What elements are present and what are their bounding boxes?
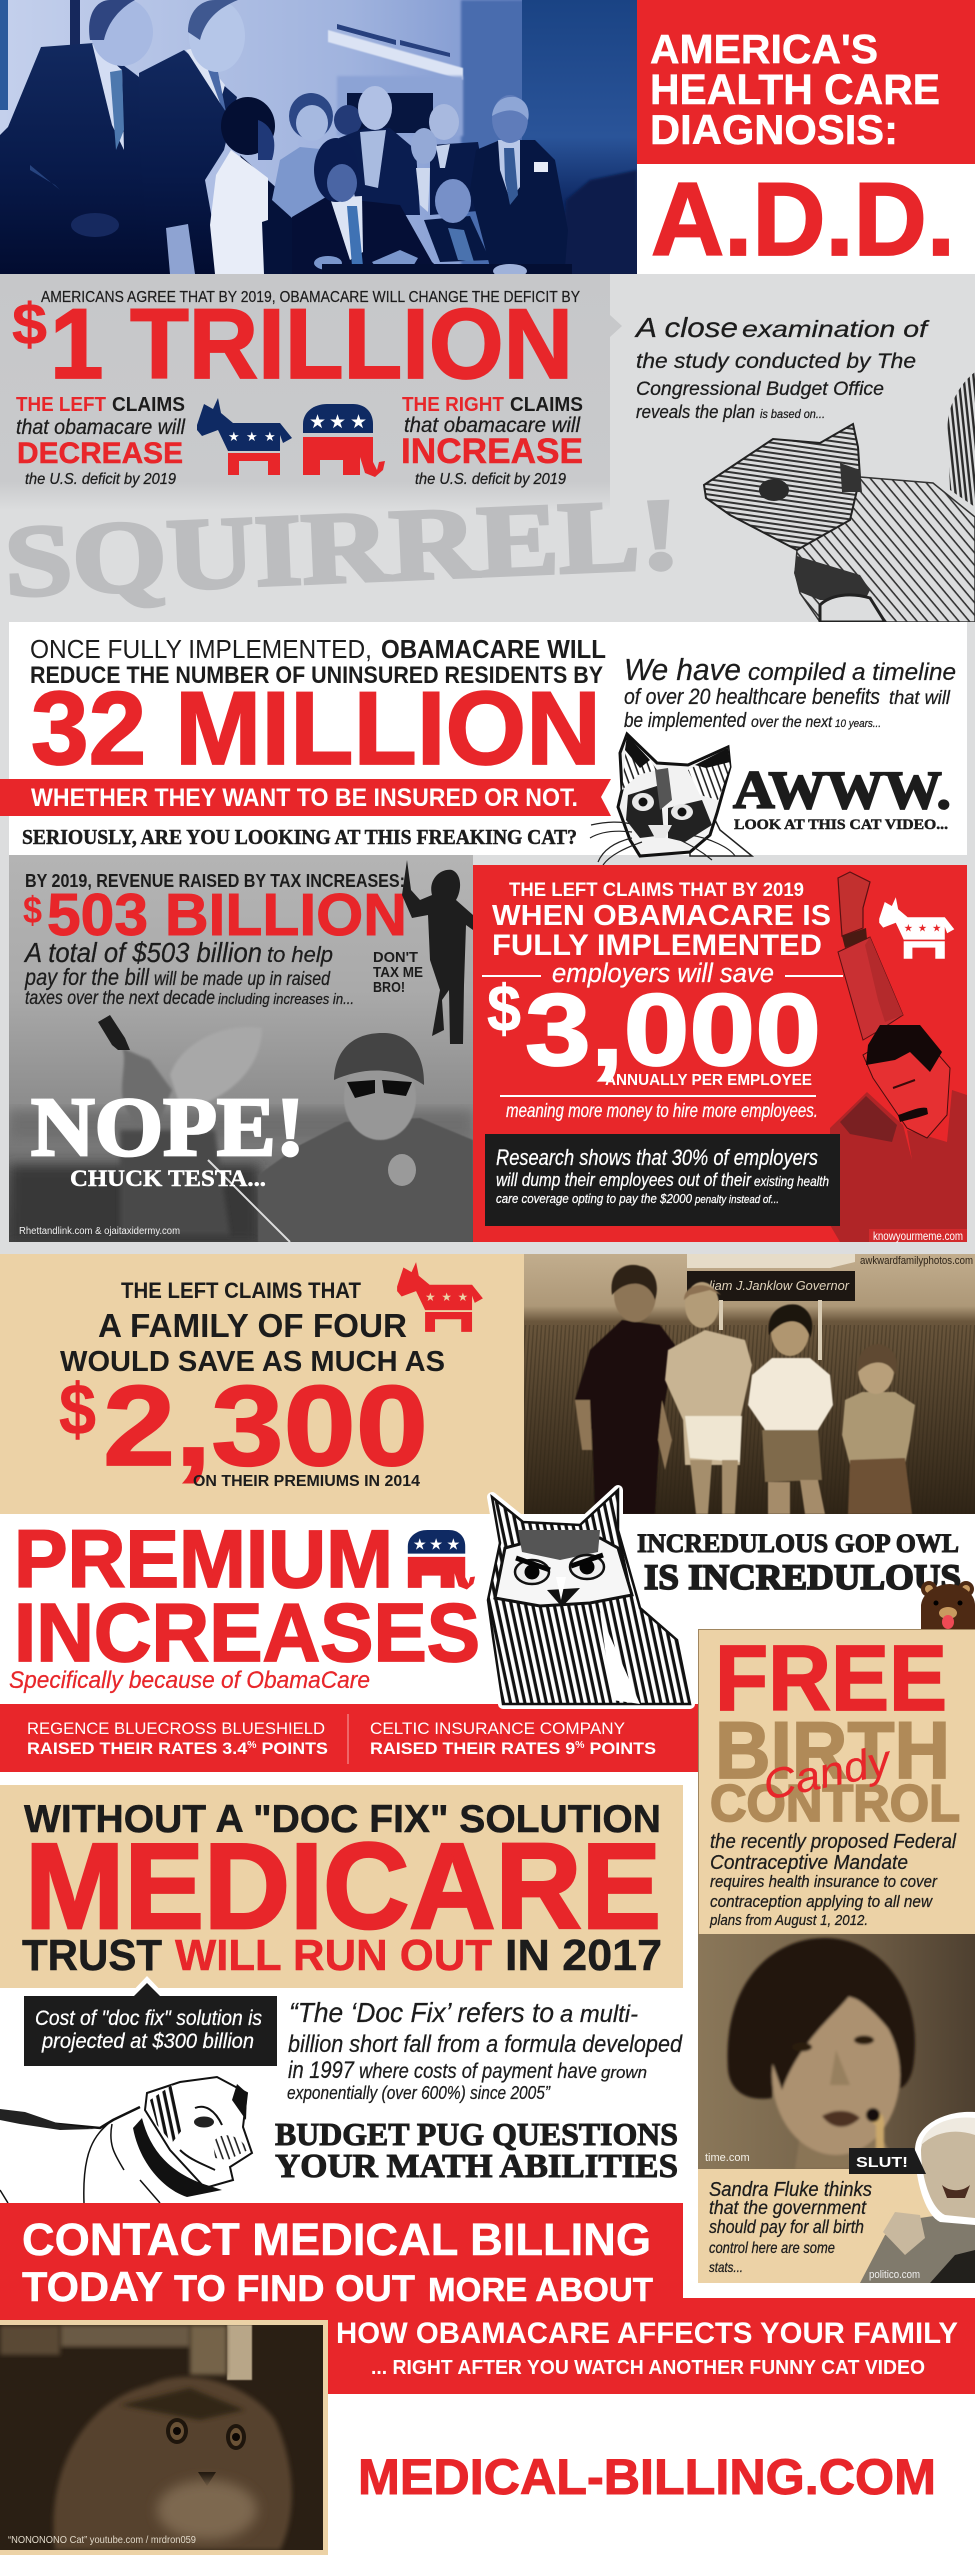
- text: timeline: be implemented: [624, 710, 747, 732]
- icon: democratic donkey: ★★★: [228, 430, 276, 445]
- right claim: the U.S. deficit by 2019: [415, 471, 566, 488]
- text block: [709, 2179, 872, 2275]
- icon: elephant: [408, 1530, 475, 1589]
- panel: employers will save: [473, 865, 967, 1243]
- figure: seated man: [424, 179, 490, 262]
- band: insurer rate rises: POINTS: [256, 1739, 328, 1758]
- text: doc fix quote: exponentially (over 600%) since 2005”: [287, 2083, 551, 2103]
- governor sign: [687, 1271, 855, 1301]
- heading: AWWW: LOOK AT THIS CAT VIDEO...: [734, 817, 948, 833]
- text: timeline: over the next: [751, 714, 832, 731]
- figure 4: [842, 1344, 915, 1514]
- panel: medicare: [0, 1785, 683, 1988]
- heading: once fully implemented: [30, 634, 606, 689]
- credit: time.com: time.com: [705, 2152, 750, 2164]
- subheading: Specifically because of ObamaCare: [9, 1667, 370, 1694]
- text: contraceptive mandate: Contraceptive Mandate: [710, 1852, 908, 1874]
- callout: research box: will dump their employees out of their: [496, 1170, 752, 1190]
- callout: research box: Research shows that 30% of employers: [496, 1145, 818, 1170]
- subheading: employers will save: employers will save: [552, 958, 774, 988]
- photo: Sandra Fluke: [698, 1934, 975, 2169]
- figure 2: [665, 1282, 752, 1514]
- big number: $1 trillion: 1 TRILLION: [50, 288, 573, 399]
- owl wing gap: [600, 1612, 640, 1704]
- text: doc fix quote: billion short fall from a formula developed: [288, 2031, 683, 2058]
- band: insurer rate rises: [0, 1704, 698, 1772]
- hair: [866, 1025, 942, 1072]
- heading: medicare: MEDICARE: [25, 1818, 661, 1954]
- call to action text: [22, 2214, 958, 2379]
- figure: boy in white shirt: [210, 97, 300, 274]
- heading: family savings: A FAMILY OF FOUR: [98, 1307, 407, 1344]
- heading: free birth control: CONTROL: [710, 1775, 960, 1833]
- text: contraceptive mandate: requires health insurance to cover: [710, 1872, 938, 1891]
- right claim: INCREASE: [401, 432, 583, 471]
- ribbon: insured or not: WHETHER THEY WANT TO BE INSURED OR NOT.: [31, 784, 578, 812]
- text: total of $503 billion: to help: [267, 942, 333, 967]
- heading: NOPE: CHUCK TESTA...: [70, 1166, 266, 1191]
- text: timeline: of over 20 healthcare benefits: [624, 684, 880, 709]
- callout: cost of doc fix: [24, 1976, 277, 2066]
- text: total of $503 billion: will be made up in raised: [154, 969, 331, 990]
- left claim: that obamacare will: [16, 416, 186, 439]
- panel: tax revenue with Chuck Testa photo: [9, 855, 473, 1243]
- left claim: the U.S. deficit by 2019: [25, 471, 176, 488]
- big number: $3,000: ANNUALLY PER EMPLOYEE: [605, 1072, 812, 1089]
- banner: contact medical billing: [0, 2203, 975, 2394]
- left claim: [16, 394, 186, 488]
- callout: cost of doc fix: projected at $300 billion: [41, 2030, 254, 2053]
- pug head: [145, 2077, 252, 2188]
- photo elements: [9, 1015, 473, 1243]
- text: total of $503 billion: A total of $503 billion: [23, 937, 262, 968]
- big acronym A.D.D.: A.D.D.: [651, 162, 955, 278]
- text block: Sandra Fluke thinks: [709, 2179, 872, 2201]
- text: timeline: that will: [889, 688, 951, 709]
- text: total of $503 billion: pay for the bill: [24, 964, 150, 990]
- heading: free birth control: [710, 1626, 960, 1833]
- big number: 32 million: 32 MILLION: [31, 671, 601, 787]
- icon: budget pug: [0, 2077, 252, 2203]
- pug collar: [133, 2118, 222, 2197]
- panel: family of four: [0, 1254, 524, 1514]
- heading: trust runs out: [22, 1931, 662, 1980]
- icon: owl: [488, 1490, 690, 1704]
- icon: pedobear: [921, 1581, 975, 1629]
- heading: trust runs out: TRUST: [22, 1931, 162, 1980]
- figure: Reid and others: [334, 86, 490, 215]
- callout: research box: care coverage opting to pay the $2000: [496, 1191, 693, 1206]
- squirrel body: [795, 477, 975, 622]
- panel: premium increases: [0, 1514, 698, 1772]
- text: contraceptive mandate: plans from August 1, 2012.: [709, 1912, 868, 1929]
- text block: stats...: [709, 2259, 743, 2275]
- squirrel tail: [948, 372, 975, 507]
- text: close examination: Congressional Budget Office: [636, 379, 884, 400]
- text: timeline: compiled a timeline: [748, 659, 956, 686]
- heading: budget pug: YOUR MATH ABILITIES: [275, 2148, 678, 2185]
- callout: cost of doc fix: Cost of "doc fix" solution is: [35, 2007, 262, 2030]
- big number: $2,300: $: [59, 1370, 96, 1450]
- caption: don't tax me bro: BRO!: [373, 979, 405, 996]
- left claim: CLAIMS: [112, 394, 185, 416]
- photo: bill signing in blue duotone: [0, 0, 637, 278]
- credit: politico: politico.com: [869, 2269, 920, 2281]
- watermark: SQUIRREL!: SQUIRREL!: [2, 478, 682, 619]
- big number: $503 billion: 503 BILLION: [47, 882, 407, 948]
- text: timeline: 10 years...: [835, 718, 881, 730]
- title text: AMERICA'S: [650, 26, 878, 72]
- heading: left claims: THE LEFT CLAIMS THAT BY 2019: [509, 880, 804, 901]
- text: total of $503 billion: taxes over the next decade: [25, 988, 215, 1009]
- photo: Rush Limbaugh: [860, 2112, 975, 2283]
- icon: elephant: ★★★: [413, 1536, 460, 1554]
- call to action text: HOW OBAMACARE AFFECTS YOUR FAMILY: [336, 2317, 958, 2350]
- text: doc fix quote: a multi-: [560, 2001, 638, 2028]
- panel: uninsured residents: [0, 622, 967, 865]
- callout: research box: penalty instead of...: [694, 1194, 779, 1206]
- icon: silhouette: [402, 860, 473, 1044]
- heading: budget pug: [275, 2116, 678, 2185]
- title panel: [637, 0, 975, 164]
- figure: left man: [0, 0, 160, 274]
- heading: trust runs out: WILL RUN OUT: [175, 1931, 492, 1980]
- heading: free birth control: FREE: [715, 1626, 947, 1730]
- squirrel head: [704, 424, 860, 550]
- icon: democratic donkey: [197, 398, 292, 475]
- heading: family savings: [60, 1278, 445, 1378]
- call to action text: ... RIGHT AFTER YOU WATCH ANOTHER FUNNY CAT VIDEO: [371, 2357, 925, 2379]
- title text: DIAGNOSIS:: [650, 106, 898, 153]
- right claim: [401, 394, 583, 488]
- callout: research box: [485, 1134, 840, 1226]
- heading: free birth control: Candy: [759, 1736, 897, 1809]
- caption: don't tax me bro: DON'T: [373, 949, 418, 966]
- torso: [830, 1090, 967, 1242]
- text: more money: meaning more money to hire more employees.: [506, 1101, 818, 1122]
- pug back and body lines: [54, 2106, 140, 2130]
- text: total of $503 billion: [23, 937, 354, 1009]
- band: insurer rate rises: REGENCE BLUECROSS BLUESHIELD: [27, 1719, 325, 1738]
- band: insurer rate rises: %: [247, 1740, 257, 1751]
- text: contraceptive mandate: the recently proposed Federal: [710, 1831, 957, 1853]
- text: total of $503 billion: including increases in...: [218, 991, 354, 1008]
- icon: cat drawing: [590, 734, 752, 865]
- heading: GOP owl: IS INCREDULOUS: [644, 1557, 961, 1597]
- call to action text: TODAY: [22, 2263, 163, 2310]
- left claim: THE LEFT: [16, 394, 106, 416]
- heading: GOP owl: INCREDULOUS GOP OWL: [637, 1529, 959, 1558]
- heading: NOPE: NOPE!: [31, 1081, 305, 1174]
- text: doc fix quote: [287, 1997, 683, 2103]
- heading: left claims: FULLY IMPLEMENTED: [492, 929, 822, 962]
- raised arm: [838, 937, 903, 1040]
- illustration: Freddie Mercury: [830, 872, 967, 1242]
- figure 1: [575, 1265, 675, 1514]
- text: doc fix quote: in 1997: [288, 2057, 355, 2084]
- icon: red donkey: [397, 1262, 483, 1332]
- callout: research box: existing health: [754, 1173, 829, 1189]
- big number: $3,000: $: [487, 971, 521, 1045]
- big number: $2,300: ON THEIR PREMIUMS IN 2014: [193, 1473, 420, 1490]
- title text: [650, 26, 940, 153]
- band: insurer rate rises: RAISED THEIR RATES 9: [370, 1739, 565, 1758]
- left claim: DECREASE: [17, 437, 183, 470]
- text: timeline: [624, 652, 956, 732]
- photo: awkward family: [524, 1254, 975, 1514]
- credit: nononono cat: “NONONONO Cat” youtube.com / mrdron059: [8, 2535, 196, 2546]
- heading: premium: PREMIUM: [14, 1514, 393, 1605]
- heading: once fully implemented: ONCE FULLY IMPLEMENTED,: [30, 634, 372, 664]
- text block: should pay for all birth: [709, 2217, 864, 2237]
- heading: GOP owl: [637, 1529, 961, 1597]
- band: insurer rate rises: %: [575, 1740, 585, 1751]
- figure: second man: [139, 0, 245, 274]
- label: SLUT: [849, 2148, 926, 2174]
- panel: free birth control: [698, 1626, 975, 2283]
- right claim: that obamacare will: [404, 414, 581, 437]
- heading: left claims: [492, 880, 831, 962]
- right claim: THE RIGHT: [402, 394, 504, 416]
- text: close examination: is based on...: [760, 407, 825, 421]
- text: close examination: reveals the plan: [636, 402, 755, 422]
- call to action text: CONTACT MEDICAL BILLING: [22, 2214, 651, 2265]
- figure 3: [748, 1304, 833, 1514]
- call to action text: MORE ABOUT: [428, 2271, 653, 2308]
- plants bottom right: [560, 170, 637, 274]
- website URL: MEDICAL-BILLING.COM: [358, 2449, 936, 2505]
- text: contraceptive mandate: contraception applying to all new: [710, 1892, 934, 1911]
- figure: Obama signing: [292, 138, 445, 274]
- caption: don't tax me bro: TAX ME: [373, 964, 423, 981]
- heading: trust runs out: IN 2017: [505, 1931, 662, 1980]
- photo: funny cat: [0, 2320, 328, 2555]
- text: close examination: the study conducted by The: [636, 350, 916, 373]
- text: doc fix quote: grown: [601, 2063, 647, 2082]
- band: insurer rate rises: RAISED THEIR RATES 3.4: [27, 1739, 236, 1758]
- panel: deficit claims: [0, 274, 622, 510]
- heading: once fully implemented: REDUCE THE NUMBER OF UNINSURED RESIDENTS BY: [30, 662, 603, 689]
- heading: increases: INCREASES: [14, 1586, 480, 1679]
- title text: HEALTH CARE: [650, 66, 940, 114]
- caption: don't tax me bro: [373, 949, 423, 996]
- text: doc fix quote: “The ‘Doc Fix’ refers to: [289, 1997, 554, 2028]
- panel: Sandra Fluke text: [698, 2112, 975, 2283]
- text: timeline: We have: [624, 652, 741, 687]
- heading: deficit intro: AMERICANS AGREE THAT BY 2019, OBAMACARE WILL CHANGE THE DEFICIT BY: [41, 289, 580, 306]
- icon: republican elephant: ★★★: [309, 411, 367, 433]
- governor sign: liam J.Janklow Governor: [709, 1278, 850, 1293]
- icon: republican elephant: [303, 404, 385, 477]
- right claim: CLAIMS: [510, 394, 583, 416]
- heading: family savings: WOULD SAVE AS MUCH AS: [60, 1346, 445, 1378]
- label: SLUT: SLUT!: [856, 2154, 908, 2171]
- heading: family savings: THE LEFT CLAIMS THAT: [121, 1278, 362, 1303]
- heading: doc fix: WITHOUT A "DOC FIX" SOLUTION: [24, 1798, 661, 1841]
- face: [863, 1045, 950, 1138]
- icon: white donkey: ★★★: [904, 923, 941, 935]
- figure: Pelosi: [272, 93, 335, 218]
- icon: red donkey: ★★★: [425, 1290, 468, 1304]
- heading: AWWW: AWWW.: [733, 760, 951, 820]
- heading: once fully implemented: OBAMACARE WILL: [381, 634, 606, 664]
- band: insurer rate rises: POINTS: [585, 1739, 656, 1758]
- icon: squirrel: [704, 372, 975, 622]
- text: doc fix quote: where costs of payment have: [359, 2060, 597, 2083]
- caption: freaking cat: SERIOUSLY, ARE YOU LOOKING AT THIS FREAKING CAT?: [22, 825, 577, 849]
- photo credit: Rhettandlink.com & ojaitaxidermy.com: [19, 1226, 180, 1237]
- text: close examination: [634, 312, 930, 422]
- heading: revenue raised: BY 2019, REVENUE RAISED BY TAX INCREASES:: [25, 871, 405, 891]
- desk and seal: [322, 264, 572, 274]
- section background: grey: [0, 274, 975, 1254]
- big number: $2,300: 2,300: [103, 1363, 428, 1490]
- owl face: [495, 1538, 632, 1606]
- big number: $1 trillion: $: [12, 292, 47, 357]
- heading: left claims: WHEN OBAMACARE IS: [492, 900, 831, 932]
- big number: $503 billion: $: [23, 890, 42, 932]
- text: contraceptive mandate: [709, 1831, 957, 1929]
- big number: $3,000: 3,000: [525, 973, 821, 1087]
- band: insurer rate rises: CELTIC INSURANCE COMPANY: [370, 1719, 625, 1738]
- text: close examination: examination of: [742, 316, 930, 342]
- text: close examination: A close: [634, 312, 738, 343]
- figure: man on right: [470, 95, 568, 267]
- text block: control here are some: [709, 2240, 835, 2257]
- heading: free birth control: BIRTH: [715, 1706, 950, 1796]
- call to action text: TO FIND OUT: [174, 2268, 415, 2309]
- heading: budget pug: BUDGET PUG QUESTIONS: [275, 2116, 678, 2152]
- text block: that the government: [709, 2198, 867, 2219]
- icon: white donkey: [879, 897, 954, 959]
